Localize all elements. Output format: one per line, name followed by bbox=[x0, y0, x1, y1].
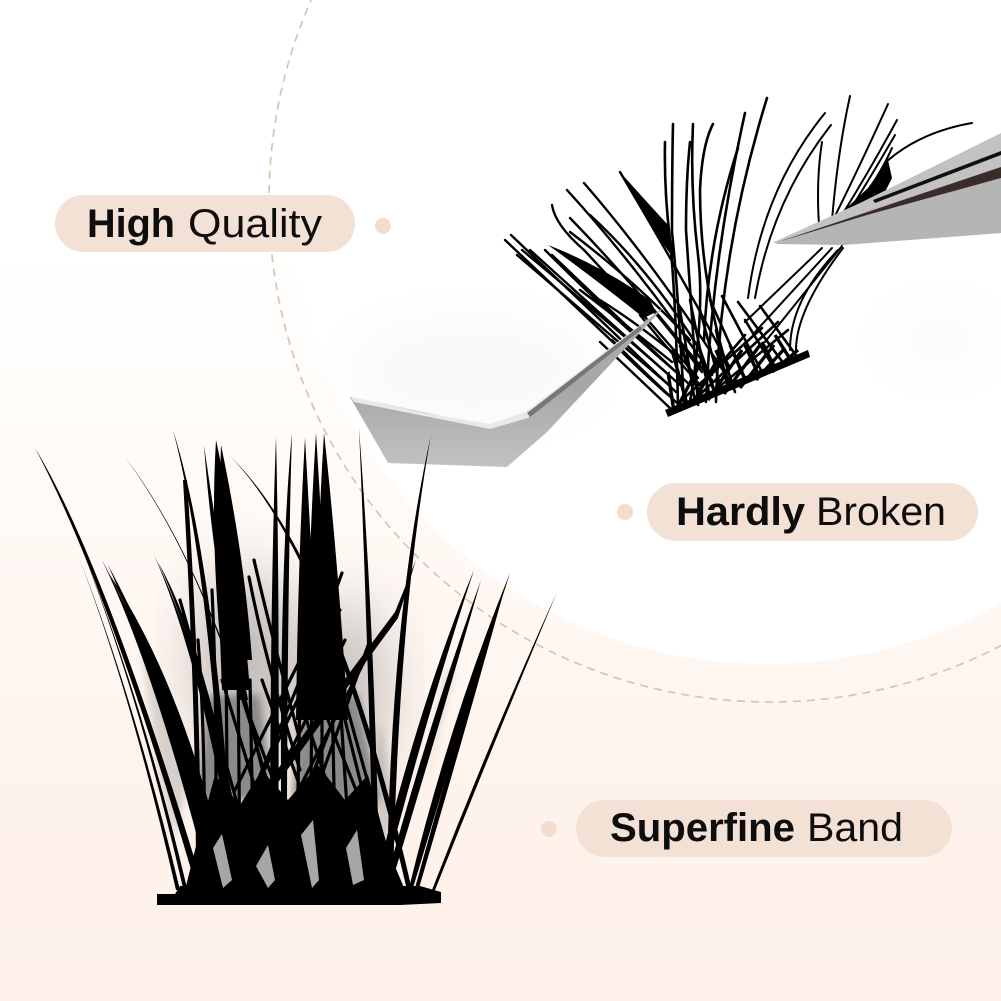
lash band bbox=[665, 350, 810, 417]
label text: Quality bbox=[188, 202, 322, 246]
right tweezer bbox=[772, 133, 1001, 245]
label: High Quality bbox=[55, 195, 355, 252]
band base lattice bbox=[668, 335, 798, 412]
label text bbox=[676, 490, 946, 534]
soft shadow bbox=[140, 570, 455, 860]
left tweezer bbox=[350, 306, 665, 467]
label: Hardly Broken bbox=[647, 483, 978, 541]
dark translucent core behind lattice bbox=[185, 695, 405, 890]
label text bbox=[610, 806, 903, 850]
marker dot: Hardly Broken bbox=[617, 504, 633, 520]
centre-right lashes bbox=[231, 428, 431, 890]
right lashes bbox=[374, 570, 557, 890]
lashes rising to right tweezers bbox=[745, 96, 972, 350]
fanned left lashes bbox=[505, 172, 730, 410]
pill bbox=[647, 483, 978, 541]
label text: Superfine bbox=[610, 806, 795, 850]
translucent gaps at lash base bbox=[213, 820, 364, 888]
label text: High bbox=[87, 202, 175, 246]
label text bbox=[87, 202, 322, 246]
pill bbox=[576, 800, 952, 857]
label text: Band bbox=[807, 806, 903, 850]
long crossing lash bbox=[195, 560, 416, 888]
left lashes bbox=[35, 430, 297, 890]
dashed circle bbox=[269, 0, 1001, 702]
label text: Broken bbox=[816, 490, 946, 534]
central lattice lashes bbox=[180, 560, 395, 885]
photo: close-up lash cluster bbox=[35, 428, 557, 905]
label text: Hardly bbox=[676, 490, 806, 534]
marker dot: High Quality bbox=[375, 218, 391, 234]
thick wedges among the fanned lashes bbox=[548, 172, 676, 318]
label: Superfine Band bbox=[576, 800, 952, 857]
photo: lash cluster held by tweezers bbox=[350, 96, 1001, 467]
marker dot: Superfine Band bbox=[541, 821, 557, 837]
white circle panel bbox=[289, 0, 1001, 664]
lash tangle at tweezers bbox=[838, 160, 892, 216]
band bbox=[157, 886, 441, 905]
dense mass bbox=[219, 610, 250, 690]
upright centre lashes bbox=[665, 98, 798, 408]
pill bbox=[55, 195, 355, 252]
